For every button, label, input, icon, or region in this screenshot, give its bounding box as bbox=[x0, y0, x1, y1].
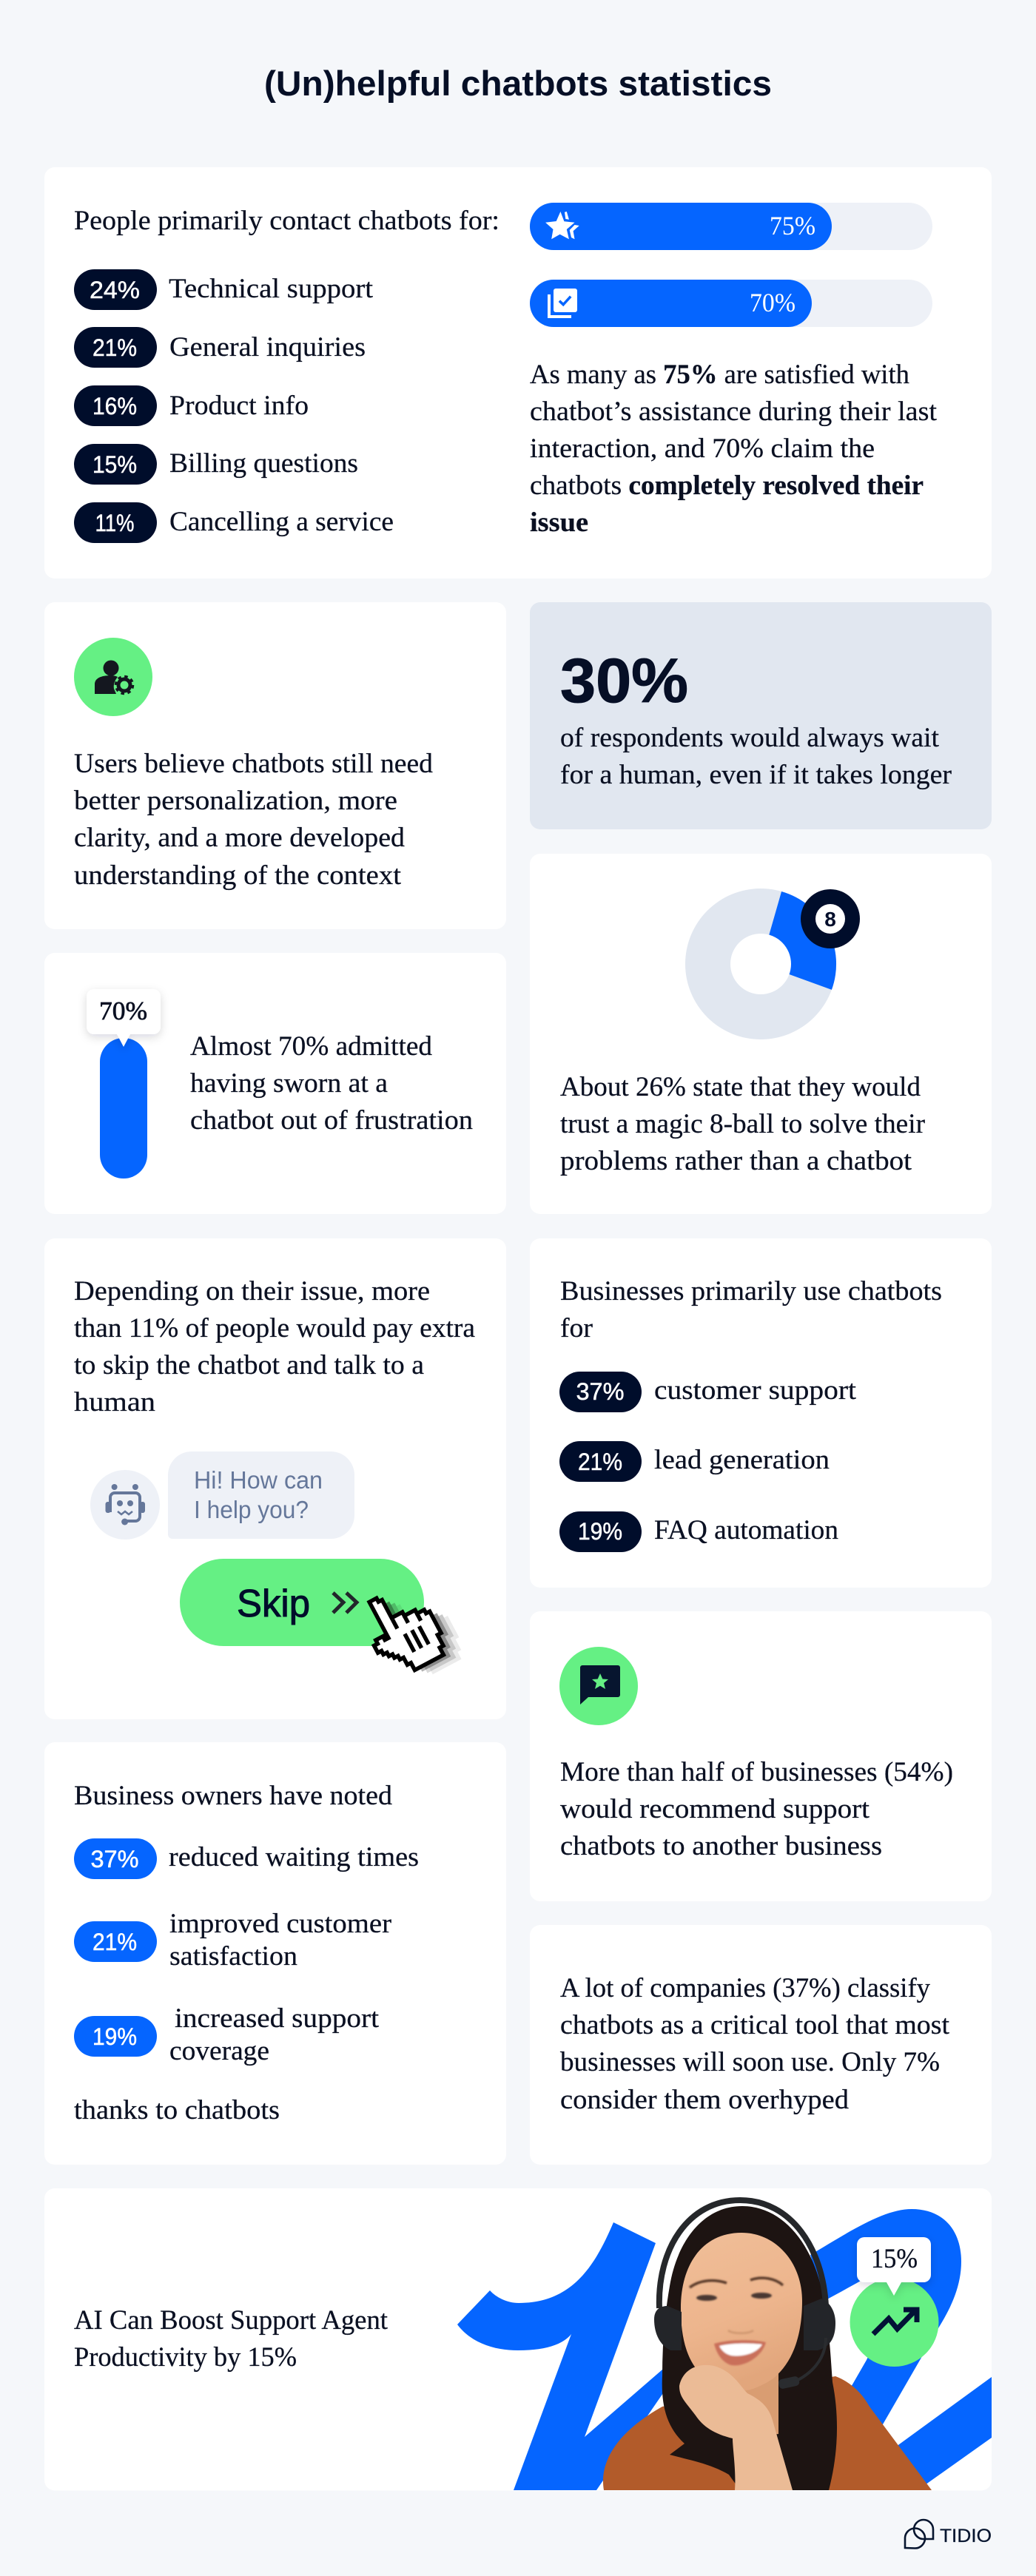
icon: robot avatar bbox=[90, 1470, 160, 1540]
text: critical tool statement: chatbots as a critical tool that most bbox=[560, 2010, 950, 2040]
text: respondents would wait: of respondents would always wait bbox=[560, 723, 940, 753]
panel: swearing at chatbots bbox=[44, 953, 506, 1214]
icon: pixel hand cursor bbox=[355, 1573, 468, 1693]
list item: customer support: customer support bbox=[654, 1375, 857, 1406]
text: satisfaction summary: issue bbox=[530, 508, 588, 538]
text: 8-ball statement: About 26% state that they would bbox=[560, 1072, 921, 1102]
icon: checked document bbox=[549, 289, 577, 317]
heading: businesses primarily use chatbots for: for bbox=[560, 1313, 593, 1343]
text: personalization statement: understanding of the context bbox=[74, 860, 402, 891]
icon: user with gear bbox=[74, 638, 152, 716]
list item: product info bbox=[74, 385, 309, 426]
text: recommendation statement: would recommend support bbox=[560, 1794, 870, 1824]
title: (Un)helpful chatbots statistics bbox=[264, 64, 772, 103]
progress bar: 75% satisfied bbox=[530, 203, 932, 250]
logo: Tidio: TIDIO bbox=[940, 2526, 992, 2546]
panel: businesses use chatbots for bbox=[530, 1238, 992, 1588]
text: pay extra statement: than 11% of people would pay extra bbox=[74, 1313, 475, 1343]
panel: personalization bbox=[44, 602, 506, 929]
callout: 15%: 15% bbox=[871, 2244, 918, 2274]
list item: technical support bbox=[74, 269, 374, 310]
text: critical tool statement: businesses will soon use. Only 7% bbox=[560, 2047, 940, 2077]
illustration: support agent with headset bbox=[603, 2200, 932, 2490]
bar: 70% vertical bbox=[100, 1038, 147, 1179]
panel: reasons for contacting chatbots and satisfaction bbox=[44, 167, 992, 579]
icon: 8-ball bbox=[801, 889, 860, 948]
text: satisfaction summary bbox=[530, 360, 938, 538]
heading: people primarily contact chatbots for: People primarily contact chatbots for: bbox=[74, 206, 500, 236]
headset bbox=[654, 2200, 835, 2390]
list item: customer support bbox=[559, 1372, 857, 1412]
chat bubble: I help you? bbox=[194, 1496, 309, 1523]
text: productivity statement: Productivity by 15% bbox=[74, 2342, 297, 2373]
panel: business owners noted bbox=[44, 1742, 506, 2165]
callout: 70% bbox=[87, 989, 161, 1047]
list item: product info: Product info bbox=[169, 391, 309, 421]
list item: increased support coverage: increased support bbox=[175, 2003, 380, 2034]
panel: pay extra to skip chatbot bbox=[44, 1238, 506, 1719]
list item: improved customer satisfaction bbox=[74, 1909, 391, 1972]
text: swearing statement: chatbot out of frustration bbox=[190, 1105, 473, 1136]
heading: business owners have noted: Business owners have noted bbox=[74, 1781, 393, 1811]
panel: magic 8-ball bbox=[530, 854, 992, 1214]
heading: businesses primarily use chatbots for: Businesses primarily use chatbots bbox=[560, 1276, 942, 1306]
text: pay extra statement bbox=[74, 1276, 475, 1417]
callout: 15% bbox=[857, 2237, 931, 2296]
text: respondents would wait: for a human, even if it takes longer bbox=[560, 760, 952, 790]
hair bbox=[662, 2206, 837, 2490]
text: critical tool statement bbox=[560, 1973, 950, 2115]
text: pay extra statement: Depending on their issue, more bbox=[74, 1276, 430, 1306]
big number: 30%: 30% bbox=[560, 646, 688, 715]
text: 8-ball statement: trust a magic 8-ball to solve their bbox=[560, 1109, 925, 1139]
text: personalization statement: Users believe chatbots still need bbox=[74, 749, 433, 779]
list item: general inquiries: 21% bbox=[92, 334, 137, 361]
text: critical tool statement: consider them overhyped bbox=[560, 2085, 850, 2115]
button: skip: Skip bbox=[237, 1582, 310, 1625]
facial features bbox=[690, 2278, 783, 2365]
text: personalization statement bbox=[74, 749, 433, 891]
list item: technical support: Technical support bbox=[169, 274, 374, 304]
panel: 30% would wait for a human bbox=[530, 602, 992, 829]
text: satisfaction summary: chatbots completely resolved their bbox=[530, 471, 924, 501]
list item: FAQ automation: 19% bbox=[578, 1518, 622, 1545]
shirt bbox=[603, 2376, 932, 2490]
list item: increased support coverage bbox=[74, 2003, 380, 2066]
list item: billing questions bbox=[74, 444, 358, 485]
text: satisfaction summary: As many as 75% are satisfied with bbox=[530, 360, 909, 390]
text: thanks to chatbots: thanks to chatbots bbox=[74, 2095, 280, 2125]
list item: cancelling a service: Cancelling a service bbox=[169, 507, 394, 537]
text: swearing statement: having sworn at a bbox=[190, 1068, 388, 1099]
list item: billing questions: 15% bbox=[92, 451, 137, 478]
decorative number shapes bbox=[457, 2209, 992, 2490]
list item: customer support: 37% bbox=[576, 1378, 625, 1405]
text: swearing statement: Almost 70% admitted bbox=[190, 1031, 432, 1062]
callout: 70%: 70% bbox=[99, 997, 147, 1025]
text: pay extra statement: human bbox=[74, 1387, 155, 1417]
list item: billing questions: Billing questions bbox=[169, 448, 358, 479]
chat bubble: Hi! How can bbox=[194, 1466, 323, 1494]
text: recommendation statement bbox=[560, 1757, 953, 1861]
icon: star speech bubble bbox=[559, 1647, 638, 1725]
text: respondents would wait bbox=[560, 723, 952, 790]
list item: improved customer satisfaction: 21% bbox=[92, 1929, 137, 1955]
list item: cancelling a service: 11% bbox=[95, 510, 135, 536]
text: recommendation statement: More than half of businesses (54%) bbox=[560, 1757, 953, 1787]
panel: recommend support chatbots bbox=[530, 1611, 992, 1901]
donut chart: 26% bbox=[685, 889, 836, 1039]
text: 8-ball statement: problems rather than a chatbot bbox=[560, 1146, 912, 1176]
text: swearing statement bbox=[190, 1031, 473, 1136]
panel: critical tool bbox=[530, 1925, 992, 2165]
heading: businesses primarily use chatbots for bbox=[560, 1276, 942, 1343]
text: productivity statement: AI Can Boost Support Agent bbox=[74, 2305, 388, 2336]
text: satisfaction summary: chatbot’s assistance during their last bbox=[530, 397, 938, 427]
text: recommendation statement: chatbots to another business bbox=[560, 1831, 882, 1861]
button: skip bbox=[180, 1559, 424, 1646]
panel: AI productivity boost bbox=[44, 2188, 992, 2490]
icon: 8-ball: 8 bbox=[824, 908, 836, 931]
text: critical tool statement: A lot of companies (37%) classify bbox=[560, 1973, 930, 2003]
list item: FAQ automation bbox=[559, 1511, 838, 1552]
chat bubble bbox=[168, 1451, 354, 1539]
list item: general inquiries bbox=[74, 327, 366, 368]
list item: improved customer satisfaction: improved customer bbox=[169, 1909, 391, 1939]
list item: lead generation: lead generation bbox=[654, 1445, 830, 1475]
progress bar: 70% resolved: 70% bbox=[750, 288, 796, 317]
face bbox=[681, 2233, 802, 2392]
list item: FAQ automation: FAQ automation bbox=[654, 1515, 838, 1545]
text: personalization statement: better personalization, more bbox=[74, 786, 397, 816]
list item: lead generation bbox=[559, 1441, 830, 1482]
text: 8-ball statement bbox=[560, 1072, 925, 1176]
list item: lead generation: 21% bbox=[578, 1449, 622, 1475]
list item: reduced waiting times: 37% bbox=[90, 1846, 139, 1872]
progress bar: 75% satisfied: 75% bbox=[770, 211, 815, 240]
list item: general inquiries: General inquiries bbox=[169, 332, 366, 363]
list item: increased support coverage: 19% bbox=[92, 2023, 137, 2050]
list item: reduced waiting times: reduced waiting times bbox=[169, 1842, 419, 1872]
logo: Tidio bbox=[905, 2520, 992, 2548]
list item: technical support: 24% bbox=[90, 277, 140, 303]
list item: reduced waiting times bbox=[74, 1838, 419, 1879]
text: productivity statement bbox=[74, 2305, 388, 2373]
hand and arm bbox=[679, 2365, 793, 2490]
text: pay extra statement: to skip the chatbot and talk to a bbox=[74, 1350, 424, 1380]
text: satisfaction summary: interaction, and 70% claim the bbox=[530, 434, 875, 464]
icon: star bbox=[545, 212, 579, 239]
progress bar: 70% resolved bbox=[530, 280, 932, 327]
icon: green circle with trend arrow bbox=[850, 2278, 938, 2367]
list item: product info: 16% bbox=[92, 393, 137, 419]
neck bbox=[744, 2373, 778, 2434]
text: personalization statement: clarity, and a more developed bbox=[74, 823, 405, 853]
list item: increased support coverage: coverage bbox=[169, 2036, 269, 2066]
list item: cancelling a service bbox=[74, 502, 394, 543]
list item: improved customer satisfaction: satisfaction bbox=[169, 1941, 297, 1972]
